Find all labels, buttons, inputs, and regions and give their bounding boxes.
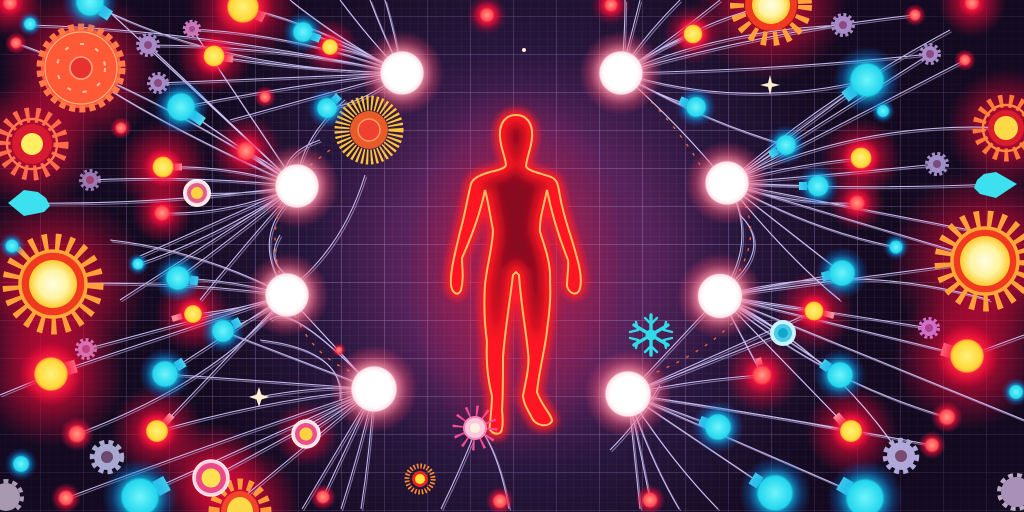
ringed target cells — [184, 180, 796, 496]
sparkle stars — [249, 48, 780, 407]
cyan orb stubs — [101, 10, 854, 489]
warm orb stubs — [66, 14, 952, 423]
snowflake cell — [630, 315, 672, 355]
spiky virus near foot — [458, 411, 492, 445]
human figure — [414, 97, 616, 446]
dotted orange connectors — [275, 90, 751, 375]
glowing white hubs — [245, 31, 769, 438]
